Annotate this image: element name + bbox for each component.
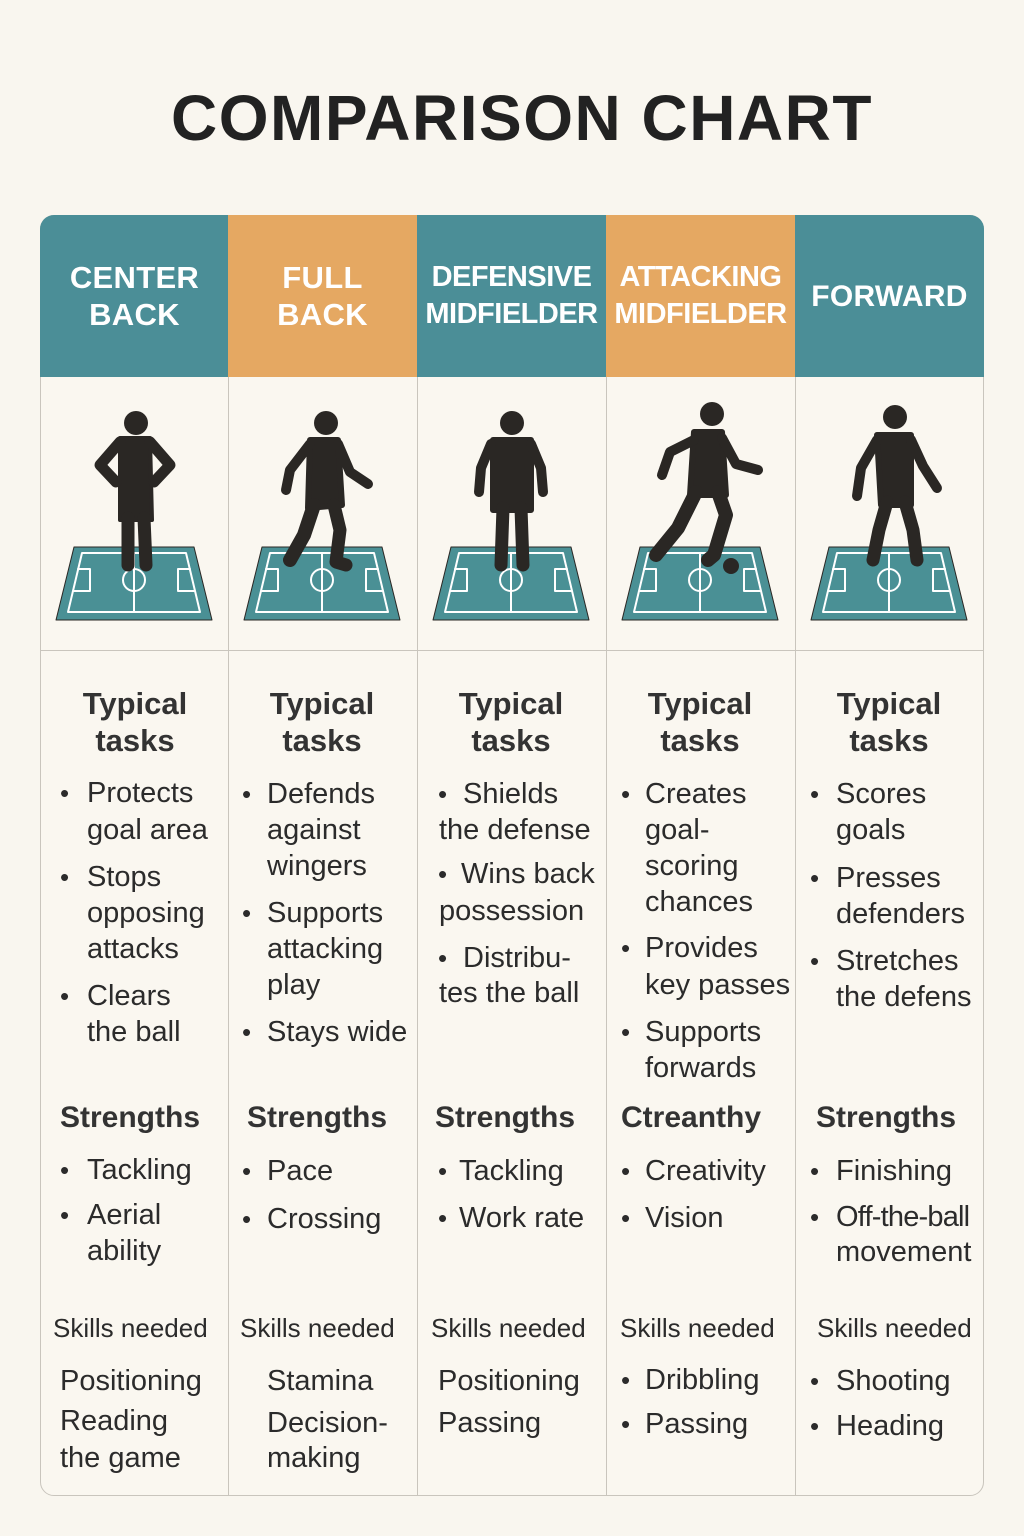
column 5: forward text: •	[810, 1156, 819, 1186]
column 5: forward text: Presses	[836, 862, 941, 894]
column 5: forward text: goals	[836, 814, 905, 846]
header: defensive midfielder: DEFENSIVE	[432, 261, 591, 293]
column 2: full back text: making	[267, 1442, 360, 1474]
column 5: forward text: •	[810, 1411, 819, 1441]
column 4: attacking midfielder text: chances	[645, 886, 753, 918]
column 2: full back text: Pace	[267, 1155, 333, 1187]
column 5: forward text: •	[810, 863, 819, 893]
column 4: attacking midfielder text: Ctreanthy	[621, 1101, 761, 1134]
column 2: full back text: Stamina	[267, 1365, 373, 1397]
column 3: defensive midfielder text: Wins back	[461, 858, 595, 890]
column 4: attacking midfielder text: forwards	[645, 1052, 756, 1084]
column 5: forward text: defenders	[836, 898, 965, 930]
column 3: defensive midfielder text: Passing	[438, 1407, 541, 1439]
column 2: full back text: attacking	[267, 933, 383, 965]
column 5: forward text: •	[810, 779, 819, 809]
column 4: attacking midfielder text: •	[621, 1156, 630, 1186]
column 4: attacking midfielder text: Provides	[645, 932, 758, 964]
header: attacking midfielder: MIDFIELDER	[614, 298, 787, 330]
icon: center back	[56, 411, 212, 620]
column 5: forward text: Strengths	[816, 1101, 956, 1134]
column 2: full back text: •	[242, 898, 251, 928]
column 4: attacking midfielder text: •	[621, 1409, 630, 1439]
column 2: full back text: against	[267, 814, 361, 846]
column 1: center back text: Reading	[60, 1405, 168, 1437]
column 1: center back text: Typical	[83, 686, 187, 721]
column 3: defensive midfielder text: tasks	[471, 723, 551, 758]
column 1: center back text: Tackling	[87, 1154, 192, 1186]
column 5: forward text: the defens	[836, 981, 971, 1013]
header: forward	[795, 215, 984, 377]
column 4: attacking midfielder text: Vision	[645, 1202, 723, 1234]
column 1: center back text: the ball	[87, 1016, 181, 1048]
column 4: attacking midfielder text: Dribbling	[645, 1364, 759, 1396]
column 5: forward text: Heading	[836, 1410, 944, 1442]
column 3: defensive midfielder text: Positioning	[438, 1365, 580, 1397]
header: center back: CENTER	[70, 260, 199, 295]
column 1: center back text: the game	[60, 1442, 181, 1474]
column 4: attacking midfielder text: •	[621, 1203, 630, 1233]
title: COMPARISON CHART	[171, 82, 873, 154]
icon: defensive midfielder	[433, 411, 589, 620]
column 5: forward text: Scores	[836, 778, 926, 810]
header: full back	[228, 215, 417, 377]
column 1: center back text: •	[60, 1200, 69, 1230]
column 5: forward text: •	[810, 1202, 819, 1232]
column 1: center back text: goal area	[87, 814, 208, 846]
column 5: forward text: Skills needed	[817, 1313, 972, 1343]
column 4: attacking midfielder text: •	[621, 779, 630, 809]
column 4: attacking midfielder text: Passing	[645, 1408, 748, 1440]
header: full back: FULL	[282, 260, 363, 295]
column 3: defensive midfielder text: •	[438, 859, 447, 889]
column 3: defensive midfielder text: •	[438, 1156, 447, 1186]
icon: full back	[244, 411, 400, 620]
column 2: full back text: •	[242, 1017, 251, 1047]
column 2: full back text: Crossing	[267, 1203, 381, 1235]
icon: attacking midfielder	[622, 402, 778, 620]
column 2: full back text: play	[267, 969, 320, 1001]
column 5: forward text: tasks	[849, 723, 929, 758]
column 2: full back text: Typical	[270, 686, 374, 721]
column 1: center back text: •	[60, 778, 69, 808]
column 4: attacking midfielder text: scoring	[645, 850, 738, 882]
header: center back	[40, 215, 229, 377]
header: center back: BACK	[89, 297, 180, 332]
column 2: full back text: •	[242, 1204, 251, 1234]
icon: forward	[811, 405, 967, 620]
column 3: defensive midfielder text: Distribu-	[463, 942, 571, 974]
column 1: center back text: •	[60, 1155, 69, 1185]
column 4: attacking midfielder text: Creates	[645, 778, 747, 810]
column 3: defensive midfielder text: the defense	[439, 814, 591, 846]
column 4: attacking midfielder text: tasks	[660, 723, 740, 758]
column 1: center back text: Positioning	[60, 1365, 202, 1397]
column 3: defensive midfielder text: Shields	[463, 778, 558, 810]
column 3: defensive midfielder text: •	[438, 779, 447, 809]
table frame	[40, 215, 984, 1496]
header: forward: FORWARD	[811, 280, 968, 312]
column 2: full back text: •	[242, 779, 251, 809]
column 1: center back text: Stops	[87, 861, 161, 893]
column 1: center back text: Skills needed	[53, 1313, 208, 1343]
column 1: center back text: ability	[87, 1235, 161, 1267]
column 2: full back text: wingers	[267, 850, 367, 882]
column 3: defensive midfielder text: Tackling	[459, 1155, 564, 1187]
column 3: defensive midfielder text: Work rate	[459, 1202, 584, 1234]
column 4: attacking midfielder text: Creativity	[645, 1155, 766, 1187]
column 5: forward text	[810, 686, 972, 1442]
column 2: full back text: Decision-	[267, 1407, 388, 1439]
column 4: attacking midfielder text: key passes	[645, 969, 790, 1001]
column 4: attacking midfielder text: •	[621, 1365, 630, 1395]
column 4: attacking midfielder text: goal-	[645, 814, 710, 846]
column 2: full back text: Skills needed	[240, 1313, 395, 1343]
column 1: center back text: •	[60, 981, 69, 1011]
column 2: full back text: Stays wide	[267, 1016, 407, 1048]
column 3: defensive midfielder text: •	[438, 943, 447, 973]
column 5: forward text: Finishing	[836, 1155, 952, 1187]
column 5: forward text: Off-the-ball	[836, 1201, 969, 1233]
column 1: center back text: Aerial	[87, 1199, 161, 1231]
column 2: full back text: Strengths	[247, 1101, 387, 1134]
column 4: attacking midfielder text: •	[621, 1017, 630, 1047]
column 5: forward text: Shooting	[836, 1365, 950, 1397]
column 5: forward text: •	[810, 1366, 819, 1396]
column 2: full back text	[240, 686, 407, 1474]
column 1: center back text: Strengths	[60, 1101, 200, 1134]
illustrations	[56, 402, 968, 620]
column 1: center back text: attacks	[87, 933, 179, 965]
column 3: defensive midfielder text: possession	[439, 895, 584, 927]
header: full back: BACK	[277, 297, 368, 332]
column 5: forward text: movement	[836, 1236, 971, 1268]
column 3: defensive midfielder text: tes the ball	[439, 977, 579, 1009]
column 4: attacking midfielder text: Skills needed	[620, 1313, 775, 1343]
header: attacking midfielder: ATTACKING	[620, 261, 781, 293]
column 3: defensive midfielder text: •	[438, 1203, 447, 1233]
column 5: forward text: Stretches	[836, 945, 958, 977]
column 2: full back text: tasks	[282, 723, 362, 758]
column 1: center back text	[53, 686, 208, 1474]
column 1: center back text: tasks	[95, 723, 175, 758]
column 3: defensive midfielder text: Strengths	[435, 1101, 575, 1134]
column 1: center back text: •	[60, 862, 69, 892]
column 4: attacking midfielder text	[620, 686, 790, 1440]
column 2: full back text: •	[242, 1156, 251, 1186]
column 4: attacking midfielder text: Supports	[645, 1016, 761, 1048]
column 3: defensive midfielder text: Skills needed	[431, 1313, 586, 1343]
column 4: attacking midfielder text: •	[621, 933, 630, 963]
column 4: attacking midfielder text: Typical	[648, 686, 752, 721]
column 1: center back text: Clears	[87, 980, 171, 1012]
column 1: center back text: opposing	[87, 897, 205, 929]
column 5: forward text: Typical	[837, 686, 941, 721]
column 2: full back text: Supports	[267, 897, 383, 929]
column 5: forward text: •	[810, 946, 819, 976]
column 3: defensive midfielder text	[431, 686, 595, 1439]
column 2: full back text: Defends	[267, 778, 375, 810]
header: defensive midfielder	[417, 215, 606, 377]
header: attacking midfielder	[606, 215, 795, 377]
header: defensive midfielder: MIDFIELDER	[425, 298, 598, 330]
column 3: defensive midfielder text: Typical	[459, 686, 563, 721]
column 1: center back text: Protects	[87, 777, 193, 809]
